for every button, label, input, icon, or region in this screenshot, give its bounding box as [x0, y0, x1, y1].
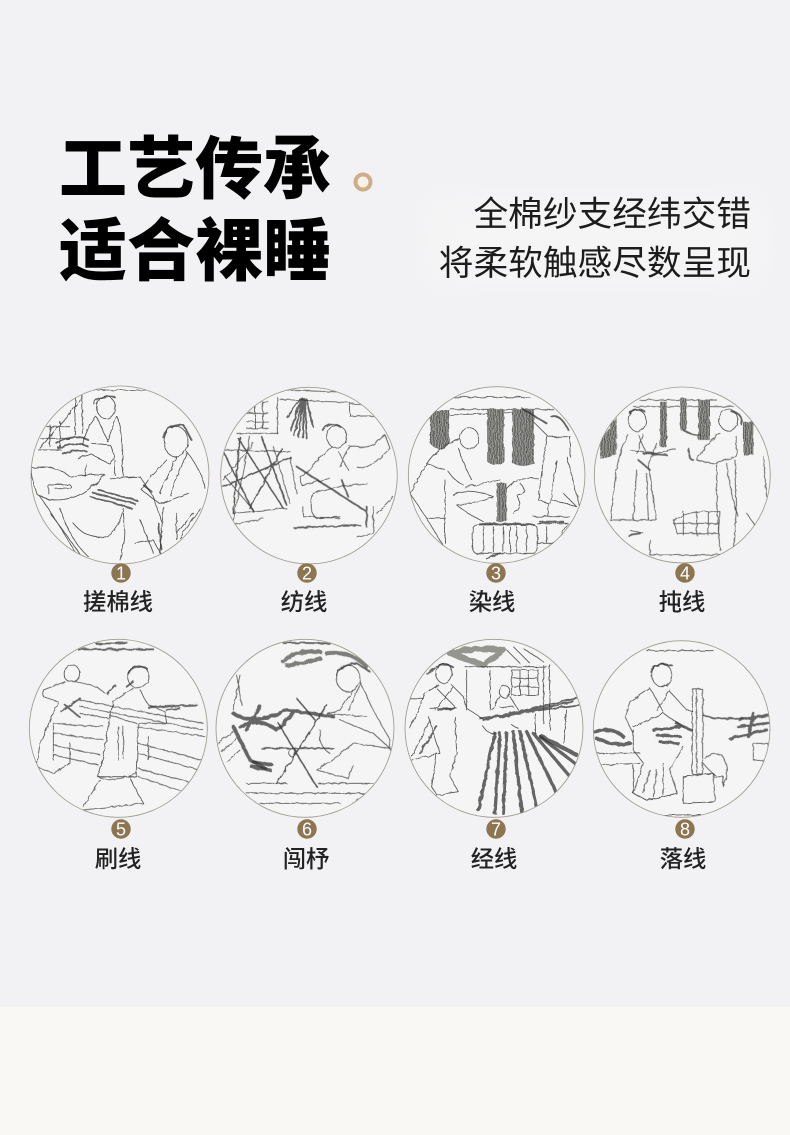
step 2 label: 纺线: [281, 589, 327, 615]
subtitle text: 全棉纱支经纬交错: [473, 195, 751, 234]
illustration 1: rubbing cotton: [31, 386, 209, 564]
step 2 badge: 2: [302, 564, 312, 584]
step 1 label: 搓棉线: [83, 589, 153, 615]
illustration 2: spinning: [221, 387, 397, 564]
illustration 5: brushing thread: [29, 639, 207, 817]
step 8 label: 落线: [660, 846, 706, 872]
subtitle text: 将柔软触感尽数呈现: [439, 244, 751, 283]
illustration 3: dyeing: [408, 387, 585, 563]
title: 工艺传承: [59, 132, 331, 208]
badges and labels row 1: [83, 563, 705, 615]
icon: ring accent: [356, 174, 370, 190]
step 6 badge: 6: [302, 820, 312, 840]
step 8 badge: 8: [680, 820, 690, 840]
step 6 badge: [297, 819, 317, 840]
step 3 badge: 3: [491, 564, 501, 584]
illustration 7: warping: [405, 639, 583, 817]
title: [59, 132, 331, 290]
step 5 badge: 5: [116, 820, 126, 840]
step 2 badge: [297, 563, 317, 584]
step 3 badge: [486, 563, 506, 584]
step 1 badge: 1: [116, 564, 126, 584]
title: 适合裸睡: [59, 214, 331, 290]
step 7 badge: [486, 819, 506, 840]
illustration 4: tugging thread: [594, 387, 770, 563]
subtitle text: [439, 195, 751, 283]
step 4 badge: 4: [680, 564, 690, 584]
step 4 badge: [675, 563, 695, 584]
illustration 6: threading the reed: [216, 639, 394, 817]
step 4 label: 扽线: [659, 589, 705, 615]
illustration 8: reeling thread: [593, 641, 770, 817]
step 1 badge: [111, 563, 131, 584]
step 8 badge: [675, 819, 695, 840]
background: lower cream band: [0, 1007, 790, 1135]
step 5 badge: [111, 819, 131, 840]
step 6 label: 闯杼: [283, 846, 329, 872]
step 3 label: 染线: [469, 589, 515, 615]
step 7 badge: 7: [491, 820, 501, 840]
step 7 label: 经线: [471, 846, 517, 872]
glow behind subtitle: [430, 200, 760, 280]
badges and labels row 2: [95, 819, 706, 872]
step 5 label: 刷线: [95, 846, 141, 872]
